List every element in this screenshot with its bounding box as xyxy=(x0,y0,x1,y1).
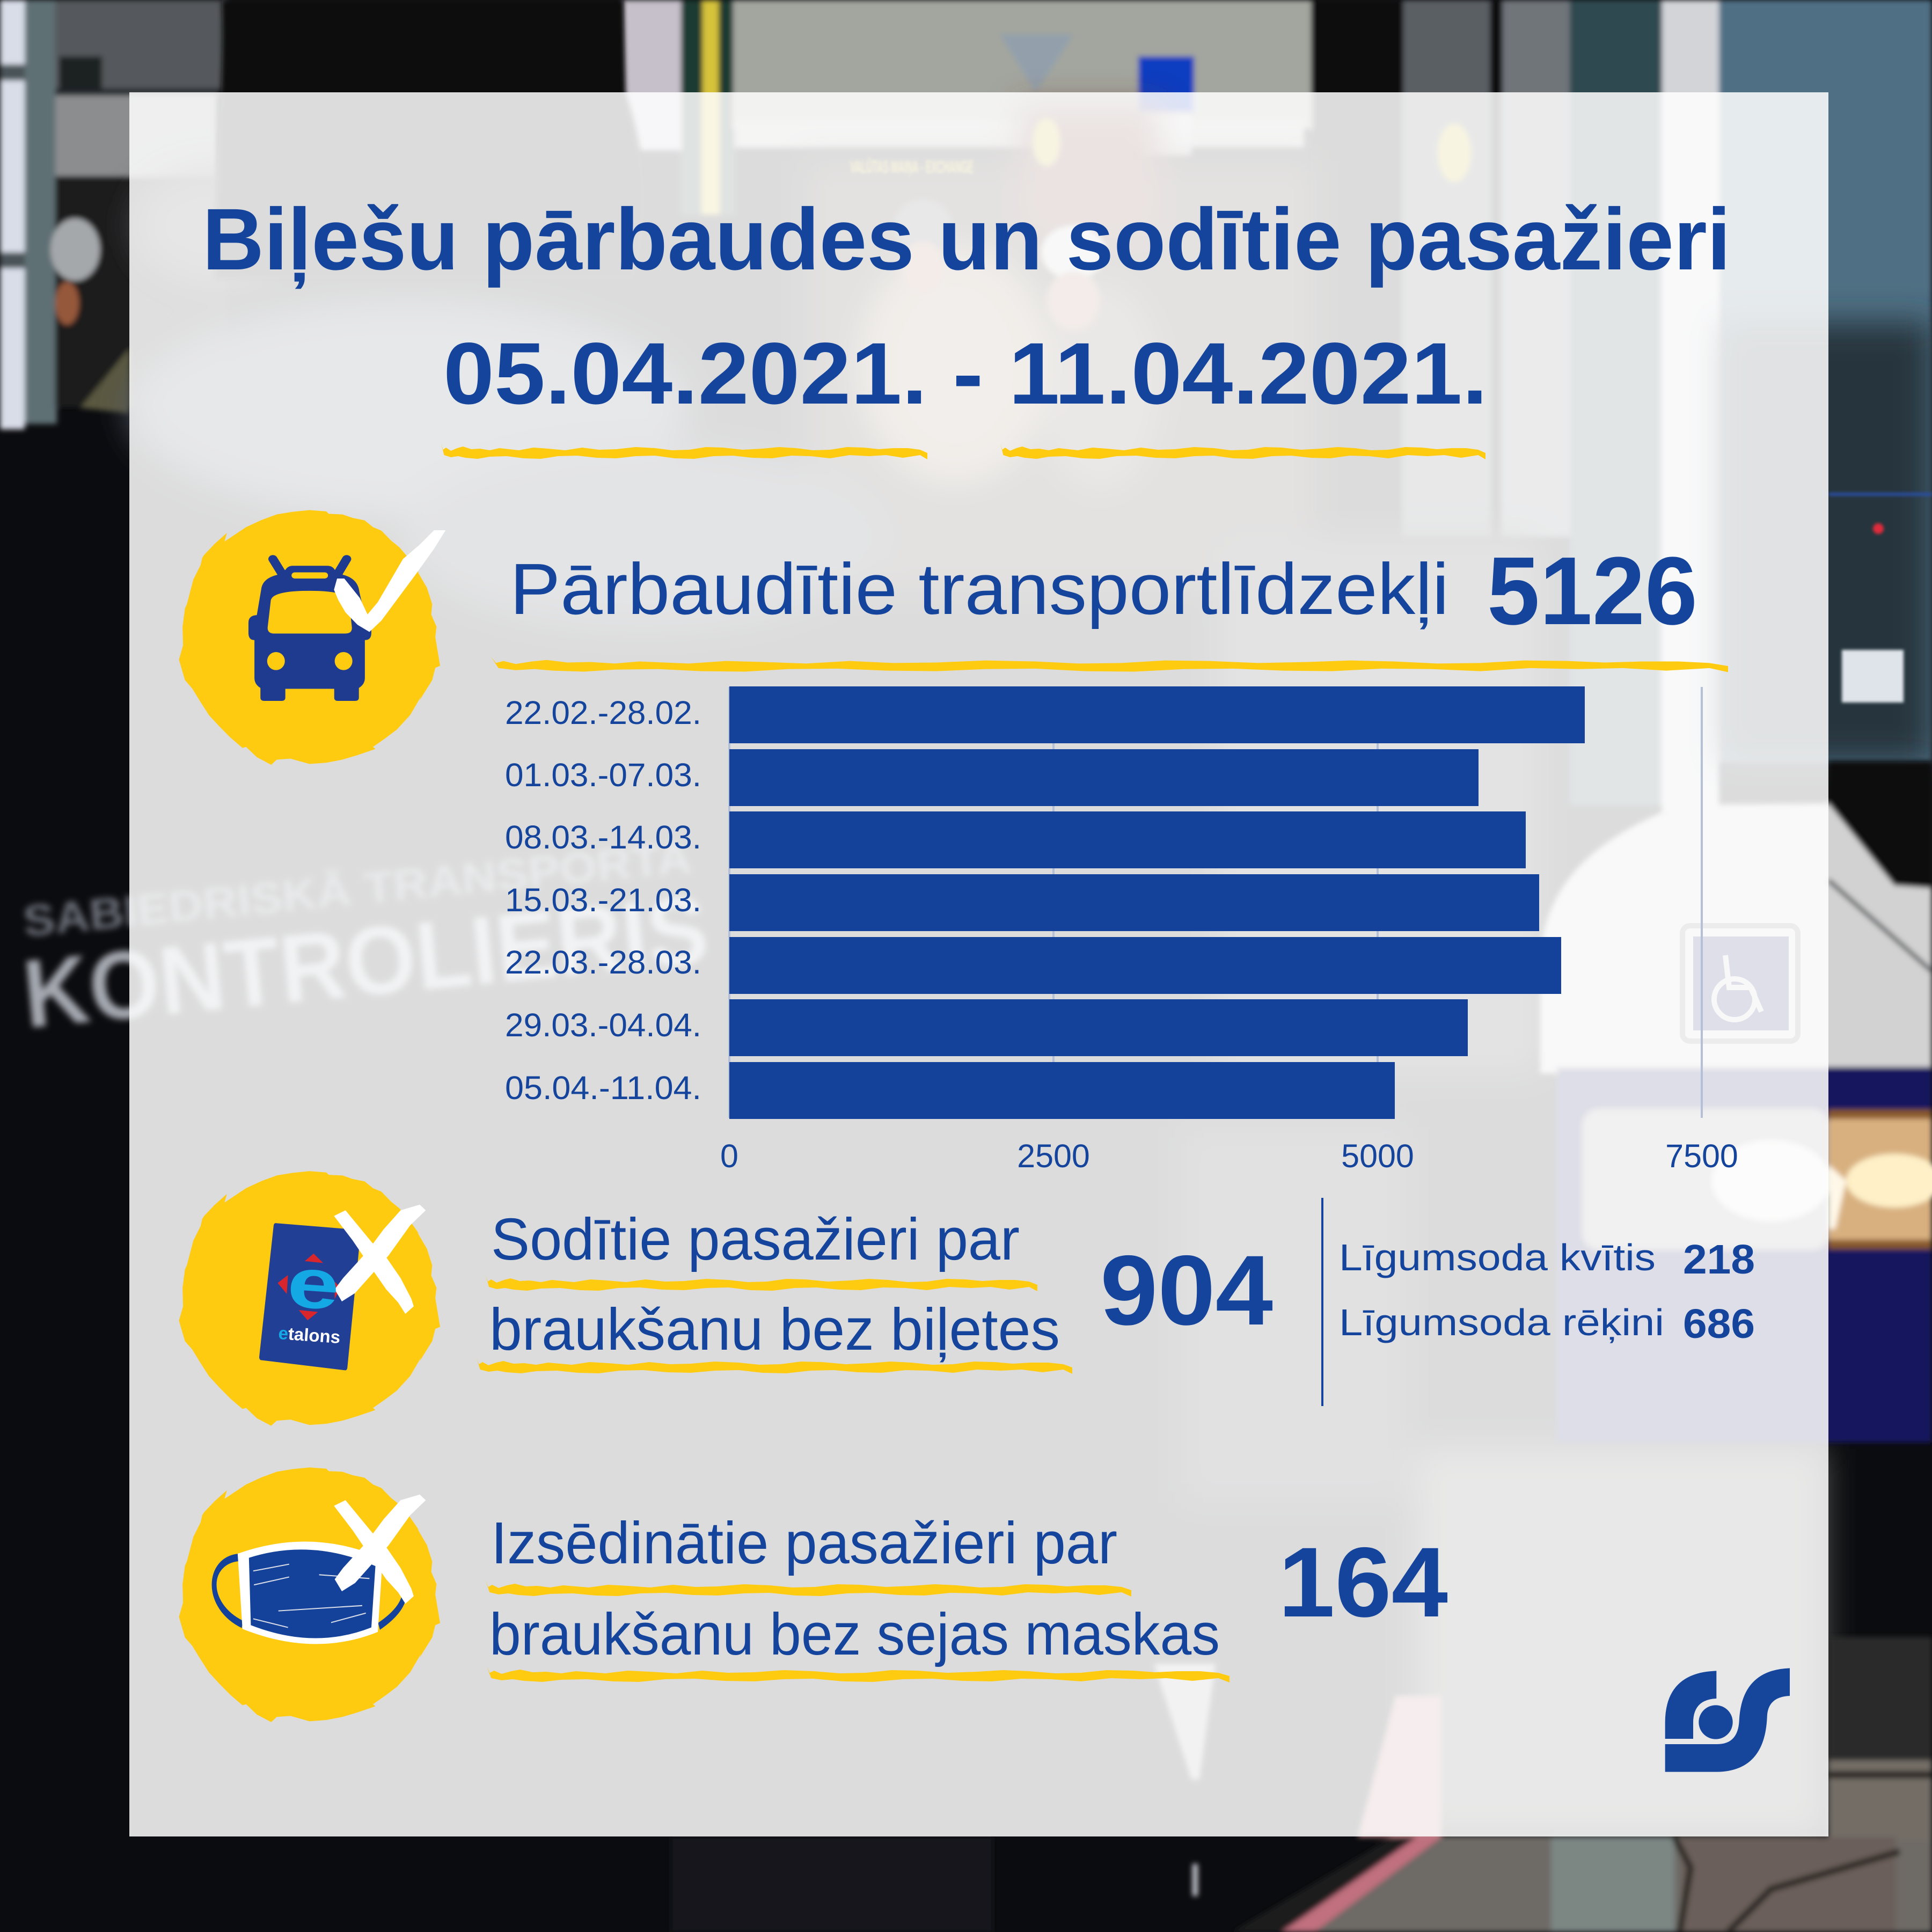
number: passengers removed: 164 xyxy=(1278,1527,1448,1638)
number: fined passengers: 904 xyxy=(1100,1235,1273,1346)
breakdown: fines: Līgumsoda kvītis xyxy=(1339,1236,1656,1278)
jacket lettering in photo: SABIEDRISKĀ TRANSPORTA xyxy=(21,833,693,946)
logo: Rigas Satiksme xyxy=(1665,1668,1790,1772)
pleats xyxy=(253,1564,369,1627)
category labels xyxy=(505,694,701,1106)
axis labels: 7500 xyxy=(1665,1138,1738,1174)
text: fined passengers xyxy=(477,1206,1072,1374)
bus white body xyxy=(1540,803,1932,1073)
background photo: street scene with inspector and tram: VALŪTAS MAIŅA - EXCHANGE xyxy=(850,157,974,177)
underline: line 1 xyxy=(486,1275,1037,1291)
ear straps xyxy=(214,1557,405,1626)
category labels: 15.03.-21.03. xyxy=(505,882,701,918)
text: passengers removed for no mask: braukšanu bez sejas maskas xyxy=(489,1601,1220,1667)
check mark xyxy=(334,530,445,632)
left signboards and post xyxy=(0,0,25,429)
underline: line 1 xyxy=(486,1580,1131,1597)
category labels: 01.03.-07.03. xyxy=(505,757,701,793)
sticker on window xyxy=(1842,650,1904,702)
bars xyxy=(729,686,1585,1119)
divider xyxy=(1321,1198,1323,1406)
title underline right xyxy=(1000,443,1485,459)
etalons wordmark on card: etalons xyxy=(278,1323,341,1347)
heading: inspected vehicles: Pārbaudītie transportlīdzekļi xyxy=(510,548,1449,630)
cobbles xyxy=(1315,1837,1932,1932)
mask fabric xyxy=(238,1542,383,1644)
text: passengers removed for no mask: Izsēdinātie pasažieri par xyxy=(491,1510,1117,1576)
icon: e-talons card with cross xyxy=(179,1171,440,1426)
category labels: 22.03.-28.03. xyxy=(505,944,701,980)
axis labels: 2500 xyxy=(1017,1138,1090,1174)
headlight visible at right xyxy=(1828,1110,1932,1249)
category labels: 08.03.-14.03. xyxy=(505,819,701,855)
headlight inside panel area xyxy=(1583,1110,1828,1249)
red arrows xyxy=(305,1254,323,1263)
category labels: 29.03.-04.04. xyxy=(505,1007,701,1043)
card xyxy=(261,1226,358,1367)
text: fined passengers: braukšanu bez biļetes xyxy=(489,1297,1060,1363)
icon: face mask with cross xyxy=(179,1467,440,1722)
tram doors and windows xyxy=(1311,0,1403,537)
breakdown: fines: 218 xyxy=(1683,1236,1755,1283)
bus blue lower body xyxy=(1556,1067,1932,1443)
icon: bus with check mark xyxy=(179,510,445,765)
wall and signs xyxy=(733,0,1313,129)
e logo on card: e xyxy=(285,1242,342,1325)
axis labels xyxy=(720,1138,1738,1174)
crowd faces and hats xyxy=(1041,225,1106,279)
translucent content panel xyxy=(129,92,1828,1836)
handicap sticker on bus xyxy=(1682,926,1798,1041)
underline: line 2 xyxy=(487,1666,1230,1682)
underline: line 2 xyxy=(477,1358,1072,1374)
underline: inspected vehicles xyxy=(491,657,1728,672)
breakdown: fines xyxy=(1339,1236,1755,1347)
text: passengers removed for no mask xyxy=(486,1510,1230,1682)
category labels: 05.04.-11.04. xyxy=(505,1070,701,1106)
trees and roof xyxy=(55,0,227,89)
breakdown: fines: 686 xyxy=(1683,1301,1755,1347)
cross xyxy=(334,1495,426,1604)
head xyxy=(215,0,645,279)
mural and yellow pole xyxy=(623,0,682,150)
title xyxy=(202,190,1731,459)
axis labels: 5000 xyxy=(1341,1138,1414,1174)
axis labels: 0 xyxy=(720,1138,738,1174)
text: fined passengers: Sodītie pasažieri par xyxy=(491,1206,1020,1272)
breakdown: fines: Līgumsoda rēķini xyxy=(1339,1301,1664,1343)
title: Biļešu pārbaudes un sodītie pasažieri xyxy=(202,190,1731,289)
category labels: 22.02.-28.02. xyxy=(505,694,701,731)
hand and phone xyxy=(1358,1696,1441,1837)
bar chart: inspected vehicles per week xyxy=(505,686,1738,1174)
lower right dark xyxy=(1828,1637,1932,1766)
number: inspected vehicles: 5126 xyxy=(1487,537,1697,645)
bus silhouette xyxy=(248,559,371,701)
title underline left xyxy=(441,443,927,459)
title: 05.04.2021. - 11.04.2021. xyxy=(443,324,1488,422)
jacket lettering in photo: KONTROLIERIS xyxy=(18,875,713,1049)
cross xyxy=(334,1205,426,1314)
grid lines xyxy=(729,687,1702,1118)
